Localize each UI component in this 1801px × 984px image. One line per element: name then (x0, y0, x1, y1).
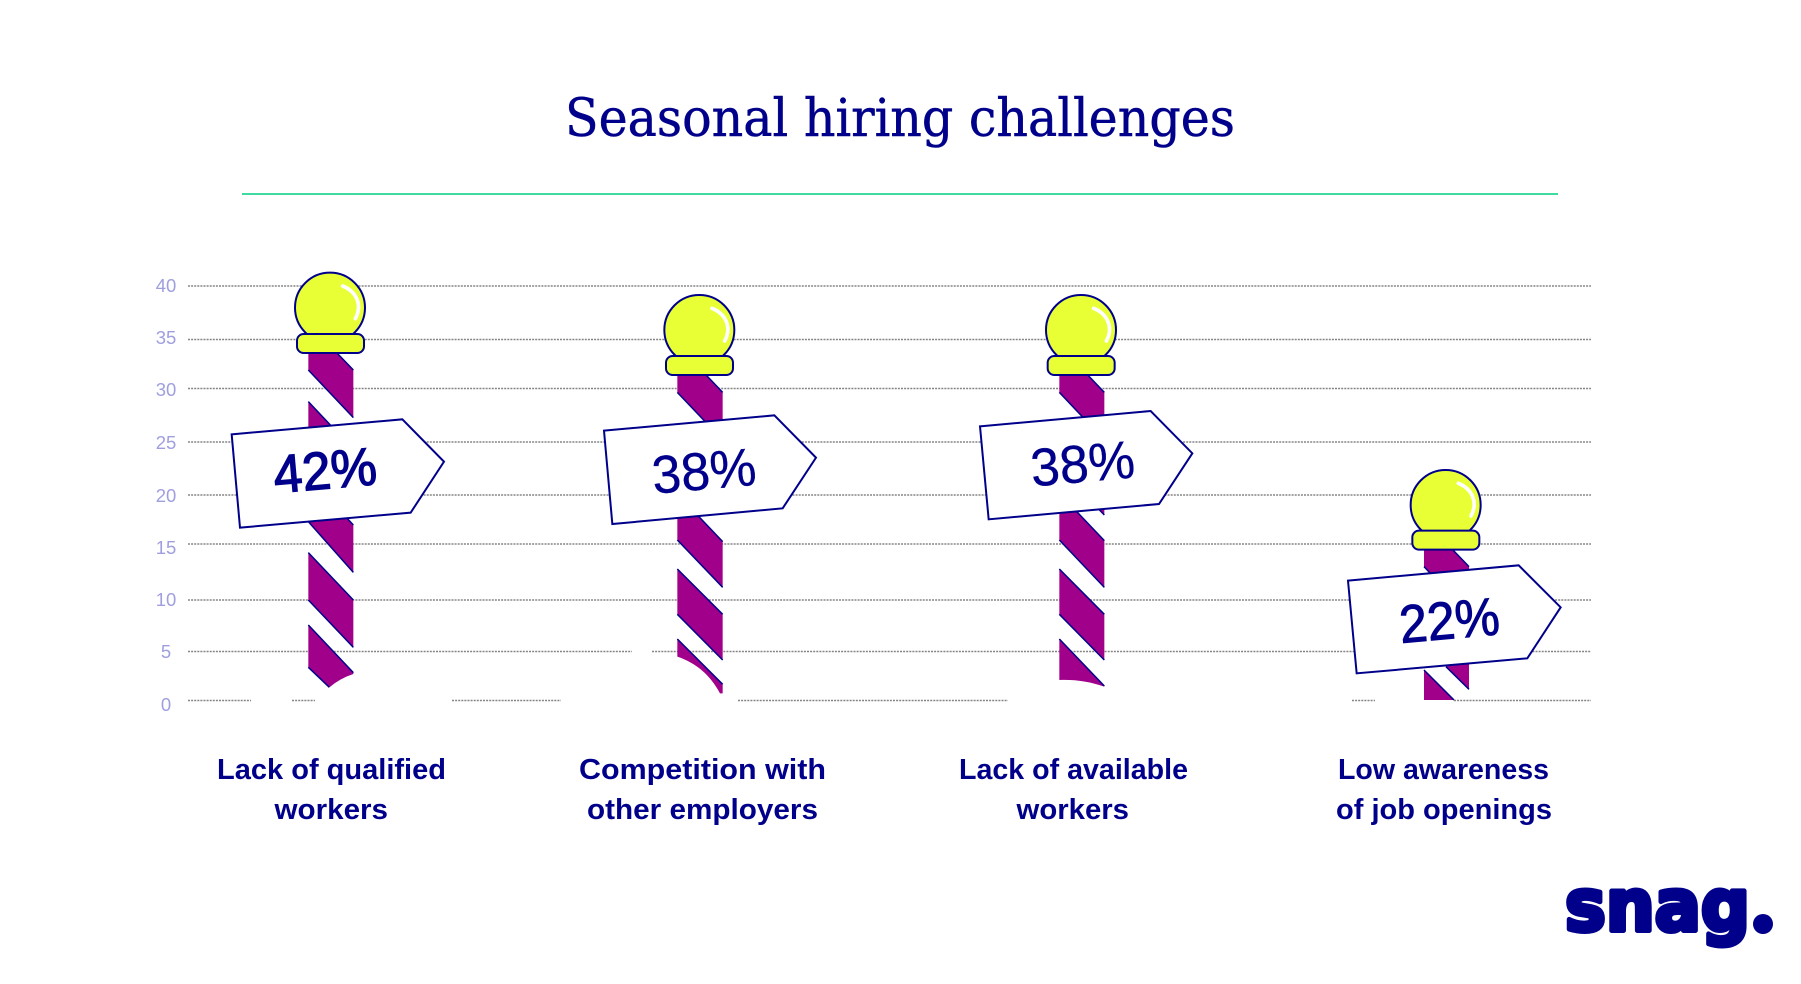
y axis labels: 0 (161, 694, 171, 715)
category label: lack of available workers: Lack of available (959, 754, 1188, 786)
y axis labels: 40 (156, 275, 176, 296)
signpost: lack of qualified workers 42% (232, 273, 444, 687)
category label: lack of available workers: workers (1015, 794, 1129, 826)
signpost: lack of available workers 38% (980, 295, 1192, 687)
y axis labels (156, 275, 176, 715)
value 42%: 42% (271, 437, 379, 505)
pole stripes (1424, 550, 1469, 700)
category label: low awareness of job openings: Low awareness (1338, 754, 1549, 786)
value 22%: 22% (1397, 587, 1502, 655)
title underline (242, 193, 1558, 195)
lamp globe (664, 295, 734, 365)
lamp globe (1411, 470, 1481, 540)
category label: lack of qualified workers (217, 754, 446, 826)
category label: lack of available workers (959, 754, 1188, 826)
lamp collar (297, 334, 364, 353)
direction sign (232, 419, 444, 528)
direction sign (980, 411, 1192, 519)
globe highlight (1094, 308, 1109, 341)
title: Seasonal hiring challenges (565, 89, 1235, 149)
globe highlight (1458, 483, 1474, 516)
pole stripes (308, 353, 353, 687)
pole stripes (1059, 376, 1104, 687)
y axis labels: 35 (156, 327, 176, 348)
lamp globe (295, 273, 365, 343)
signpost: low awareness of job openings 22% (1348, 470, 1561, 700)
signpost: competition with other employers 38% (604, 295, 816, 693)
pole stripes (677, 376, 723, 693)
category label: low awareness of job openings: of job openings (1336, 794, 1552, 826)
y axis labels: 10 (156, 589, 176, 610)
category label: competition with other employers: Competition with (579, 754, 826, 786)
value 38%: 38% (650, 438, 759, 506)
lamp collar (1412, 531, 1479, 550)
category label: low awareness of job openings (1336, 754, 1552, 826)
direction sign (604, 415, 816, 524)
category label: competition with other employers (579, 754, 826, 826)
y axis labels: 15 (156, 537, 176, 558)
direction sign (1348, 565, 1561, 673)
y axis labels: 25 (156, 432, 176, 453)
y axis labels: 5 (161, 641, 171, 662)
lamp collar (1048, 356, 1115, 375)
lamp globe (1046, 295, 1116, 365)
snag logo: snag (1565, 864, 1750, 948)
y axis labels: 30 (156, 379, 176, 400)
value 38%: 38% (1028, 431, 1137, 498)
category label: competition with other employers: other employers (587, 794, 818, 826)
category label: lack of qualified workers: workers (273, 794, 388, 826)
category label: lack of qualified workers: Lack of qualified (217, 754, 446, 786)
globe highlight (712, 308, 728, 341)
y axis labels: 20 (156, 485, 176, 506)
globe highlight (343, 286, 358, 319)
lamp collar (666, 356, 733, 375)
